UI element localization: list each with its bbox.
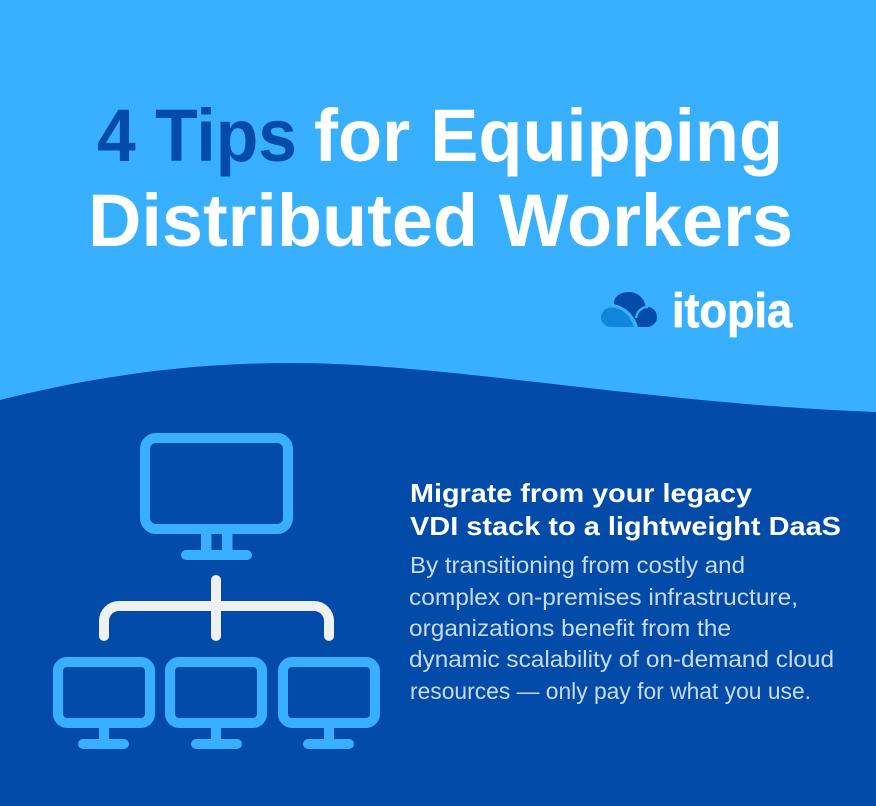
tip body text: By transitioning from costly and [410, 552, 745, 578]
tip body text: resources — only pay for what you use. [410, 678, 811, 704]
tip body text [409, 552, 834, 704]
icon: network of monitors [58, 438, 375, 749]
logo: itopia [601, 285, 792, 338]
tip heading: Migrate from your legacy [410, 478, 753, 508]
small monitor left [58, 662, 150, 749]
small monitor centre [170, 662, 262, 749]
icon: cloud [601, 292, 657, 328]
main monitor [145, 438, 288, 560]
title: Distributed Workers [88, 179, 793, 262]
title [88, 94, 793, 262]
wave panel: dark blue lower section [0, 363, 876, 806]
tip body text: complex on-premises infrastructure, [409, 584, 798, 610]
tip heading: VDI stack to a lightweight DaaS [410, 511, 841, 541]
small monitor right [283, 662, 375, 749]
tip body text: organizations benefit from the [409, 615, 731, 641]
tip heading [410, 478, 841, 541]
tip body text: dynamic scalability of on-demand cloud [409, 646, 834, 672]
connector lines [104, 580, 329, 636]
title: for Equipping [314, 94, 783, 177]
wordmark: itopia [672, 285, 792, 338]
title: 4 Tips [97, 94, 297, 177]
